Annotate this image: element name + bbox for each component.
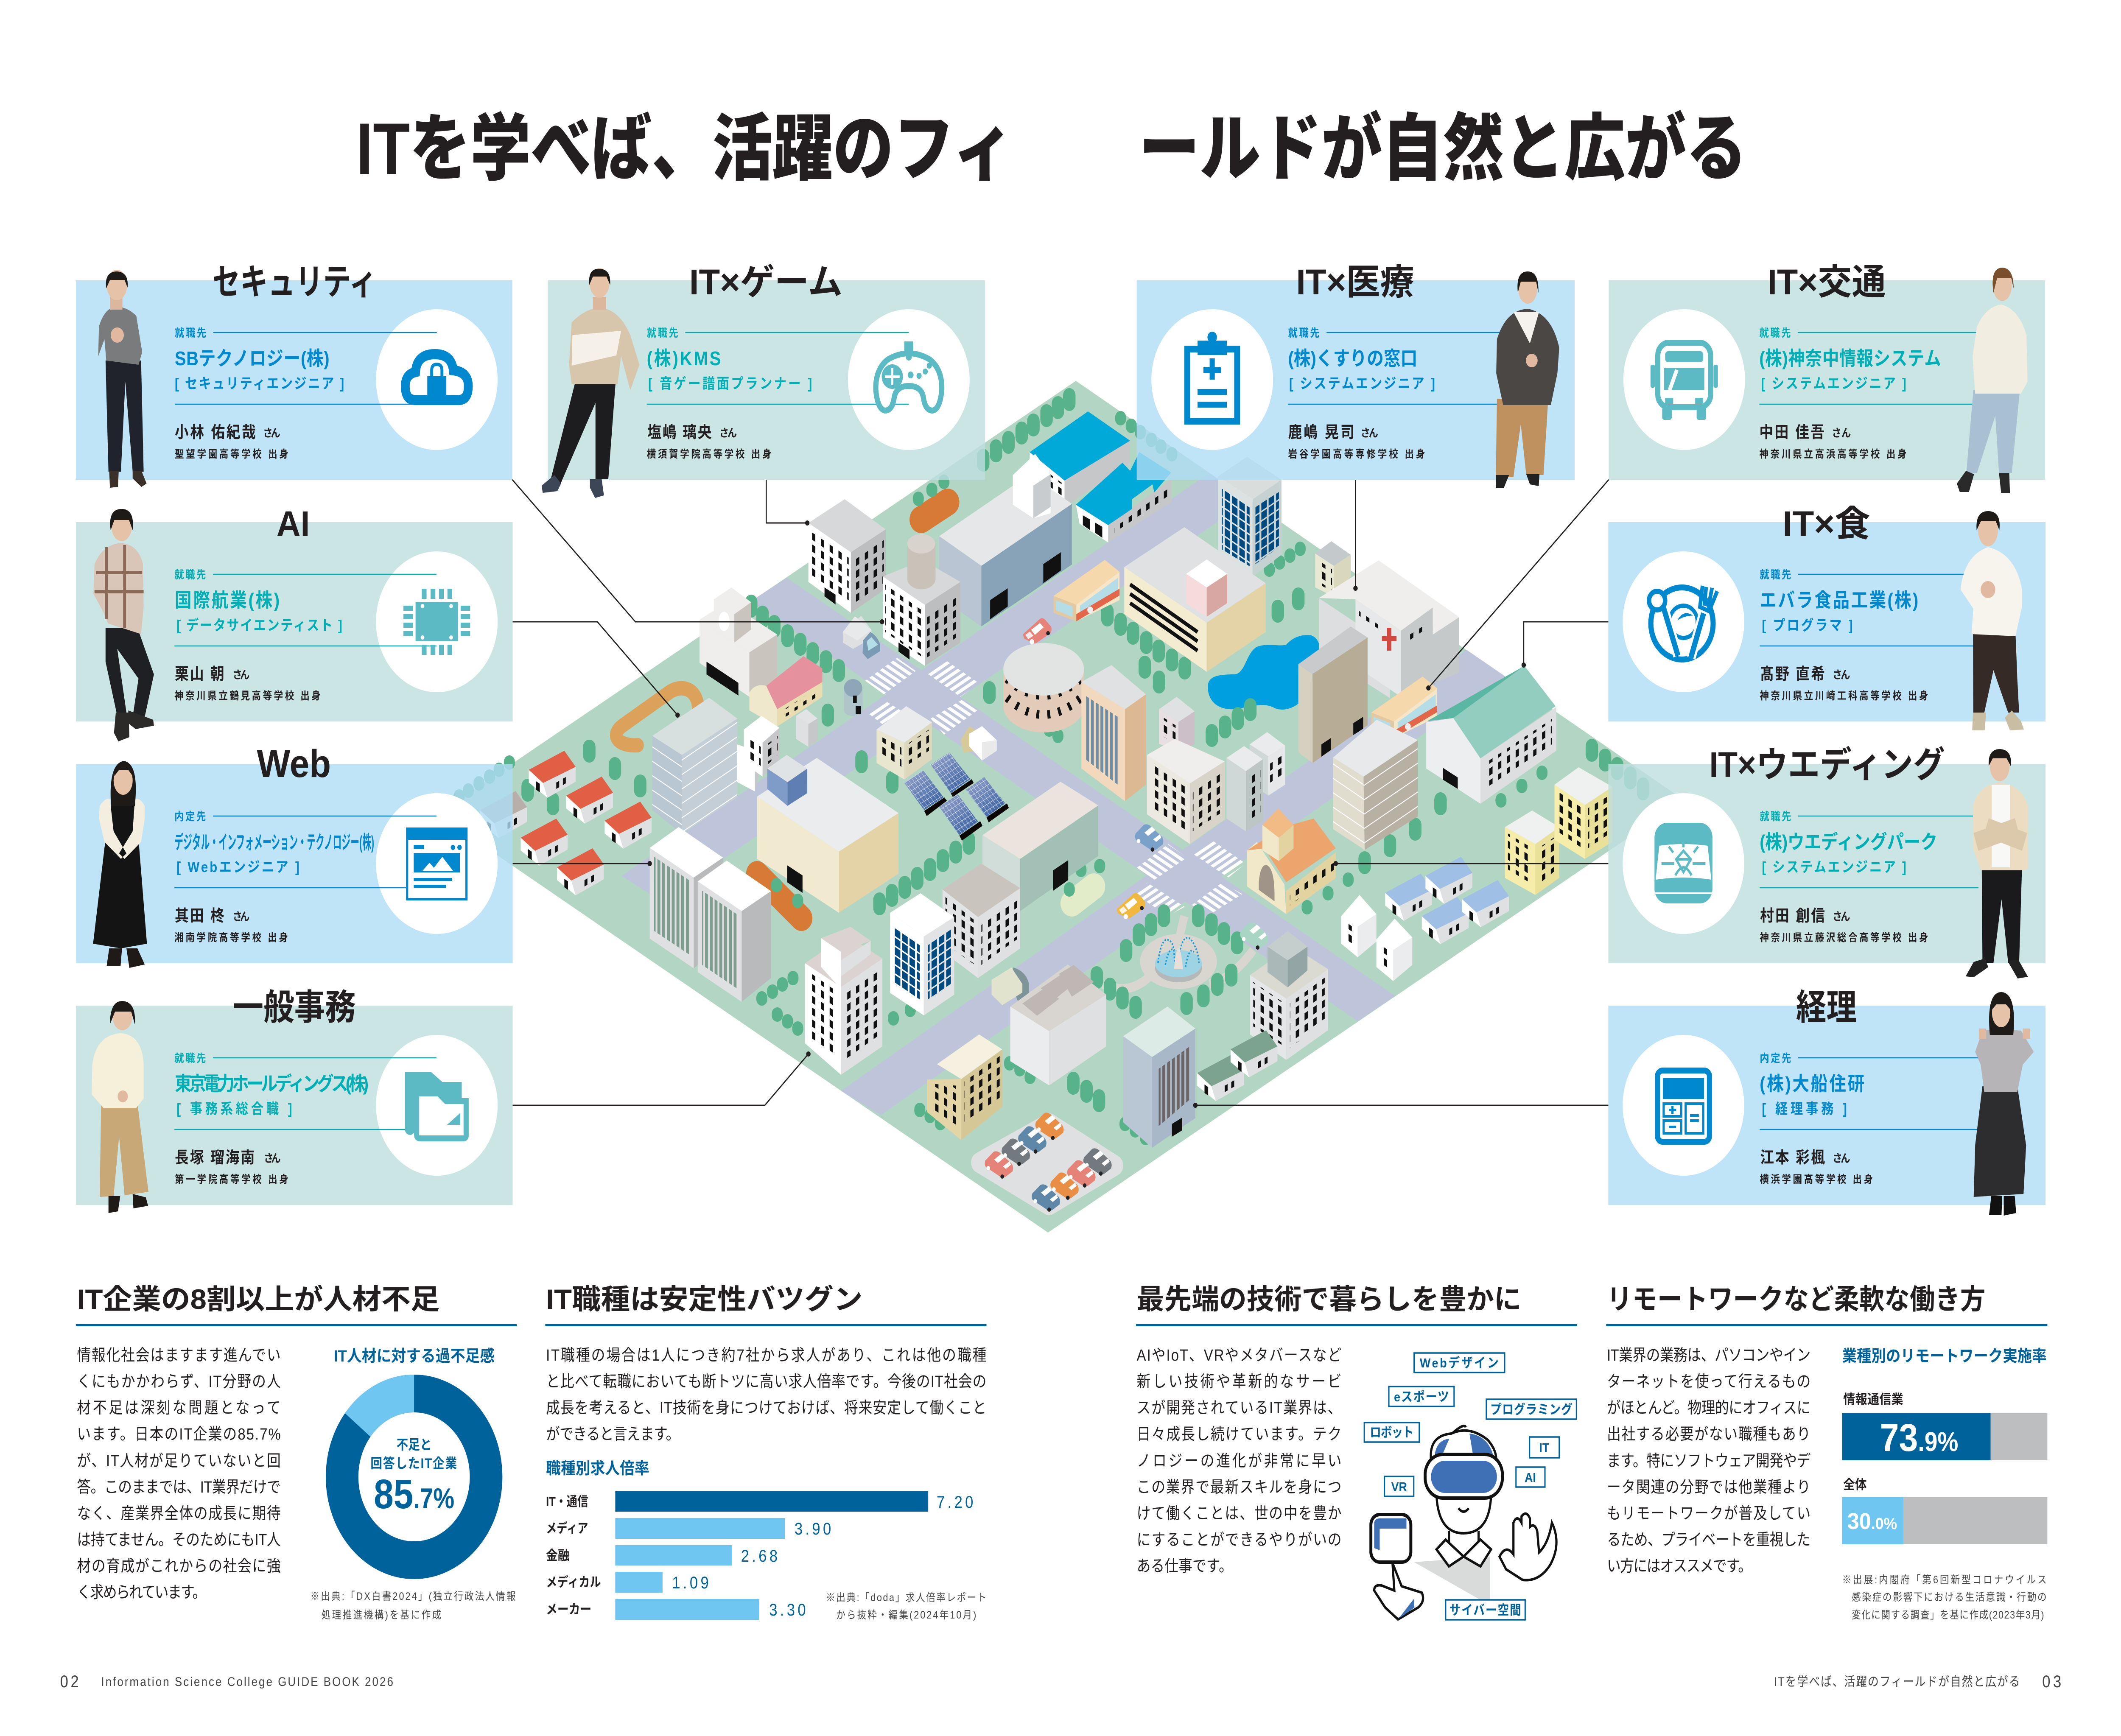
building: striped tall beige block: [1333, 720, 1418, 850]
body text: [1607, 1346, 1810, 1575]
building: white blocks by church: [1341, 895, 1412, 981]
body text: 材の育成がこれからの社会に強: [77, 1557, 281, 1575]
skill tag labels: ロボット: [1370, 1426, 1414, 1440]
building: church: [1247, 808, 1336, 914]
title: ールドが自然と広がる: [1139, 109, 1747, 190]
panel text: accounting: (株)大船住研: [1760, 1073, 1864, 1095]
panel text: office work: [ 事務系総合職 ]: [176, 1101, 292, 1117]
panel text: medical: [ システムエンジニア ]: [1289, 375, 1435, 391]
bar chart: 2.68: [741, 1546, 778, 1565]
panel: AI: [76, 504, 513, 741]
donut chart: IT人材に対する過不足感: [334, 1347, 495, 1365]
building: grey and white small blocks: [737, 709, 817, 791]
building: white apartment with box: [805, 927, 882, 1075]
body text: く求められています。: [77, 1583, 206, 1602]
body text: [1137, 1346, 1342, 1575]
building: cream apartment: [927, 1034, 1002, 1140]
illustration: person with VR headset: [1371, 1426, 1556, 1619]
building: tall glass lined office: [652, 698, 737, 834]
footer left: Information Science College GUIDE BOOK 2026: [101, 1674, 393, 1688]
panel text: accounting: 内定先: [1760, 1053, 1791, 1065]
building: hospital: [1319, 560, 1459, 698]
section: remote work: [1606, 1284, 2047, 1621]
building: blue grey office: [1123, 1006, 1195, 1148]
building: blue sawtooth factory: [1076, 452, 1171, 542]
panel text: security: さん: [263, 428, 280, 439]
panel: food: [1608, 504, 2045, 730]
remote work rate bars: 30: [1847, 1508, 1871, 1534]
body text: ノロジーの進化が非常に早い: [1137, 1452, 1342, 1470]
skill tag labels: Webデザイン: [1420, 1356, 1499, 1370]
person: security: [98, 270, 147, 488]
heading: security: セキュリティ: [213, 262, 377, 302]
building: beige apartment: [1147, 739, 1225, 844]
vehicle: white truck: [960, 726, 997, 760]
building: blue roof hall: [1030, 411, 1130, 507]
trees: [459, 395, 1643, 1139]
parks and fields: [616, 502, 1094, 918]
section: leading technology: [1136, 1284, 1577, 1620]
building: large grey blue hall: [939, 454, 1072, 626]
source note: 変化に関する調査」を基に作成(2023年3月): [1852, 1609, 2044, 1621]
panel: transport: [1609, 262, 2045, 493]
vehicle: truck by crossing: [843, 616, 880, 659]
body text: 情報化社会はますます進んでい: [77, 1346, 281, 1364]
source note: [826, 1592, 987, 1621]
heading: office work: 一般事務: [233, 987, 356, 1027]
body text: と比べて転職においても断トツに高い求人倍率です。今後のIT社会の: [546, 1373, 987, 1391]
panel text: security: [ セキュリティエンジニア ]: [175, 375, 344, 391]
panel text: game: 就職先: [647, 327, 678, 339]
panel text: game: [ 音ゲー譜面プランナー ]: [648, 375, 812, 391]
footer right: 03: [2042, 1672, 2061, 1691]
panel text: Web: 其田 柊: [175, 907, 224, 925]
heading: IT企業の8割以上が人材不足: [77, 1284, 440, 1315]
heading: transport: IT×交通: [1768, 262, 1886, 302]
panel text: transport: [1759, 327, 1979, 460]
footer right: [1774, 1672, 2061, 1691]
panel text: medical: 岩谷学園高等専修学校 出身: [1288, 448, 1425, 460]
building: cream L block: [1124, 527, 1266, 672]
building: white apartment near game line: [809, 499, 886, 613]
body text: けて働くことは、世の中を豊か: [1137, 1504, 1342, 1523]
heading: wedding: IT×ウエディング: [1709, 745, 1945, 785]
body text: スが開発されているIT業界は、: [1137, 1399, 1342, 1417]
building: small beige block: [1315, 541, 1351, 597]
body text: IT職種の場合は1人につき約7社から求人があり、これは他の職種: [546, 1346, 987, 1364]
source note: 処理推進機構)を基に作成: [322, 1609, 441, 1621]
body text: 新しい技術や革新的なサービ: [1137, 1373, 1342, 1391]
bar chart: 7.20: [937, 1493, 973, 1512]
source note: 感染症の影響下における生活意識・行動の: [1852, 1591, 2047, 1603]
panel text: wedding: [1760, 811, 1978, 943]
body text: るため、プライベートを重視した: [1607, 1531, 1810, 1549]
panel: game: [542, 262, 985, 498]
heading: accounting: 経理: [1796, 987, 1857, 1027]
building: green grey warehouse: [982, 782, 1098, 911]
bar chart: 職種別求人倍率: [546, 1459, 649, 1478]
heading: リモートワークなど柔軟な働き方: [1607, 1284, 1985, 1315]
panel text: office work: 長塚 瑠海南: [175, 1149, 255, 1167]
panel text: Web: [ Webエンジニア ]: [176, 859, 299, 875]
icon: folder: [405, 1072, 466, 1138]
building: green roof school: [1426, 666, 1556, 804]
panel text: Web: [174, 811, 437, 943]
building: chapel like white block: [700, 587, 777, 697]
panel text: game: さん: [719, 428, 737, 439]
bar chart: 1.09: [672, 1573, 709, 1592]
panel text: wedding: [ システムエンジニア ]: [1762, 859, 1906, 875]
crosswalks: [865, 658, 1245, 916]
panel text: accounting: 江本 彩楓: [1760, 1149, 1825, 1167]
icon: bus: [1651, 343, 1718, 420]
person: AI: [93, 509, 154, 741]
icon: game controller: [876, 341, 942, 411]
skill tag labels: プログラミング: [1490, 1402, 1573, 1417]
skill tag labels: AI: [1525, 1470, 1536, 1485]
panel text: medical: 就職先: [1288, 327, 1320, 339]
person: food: [1961, 511, 2024, 730]
body text: なく、産業界全体の成長に期待: [77, 1504, 281, 1523]
person: medical: [1496, 271, 1559, 488]
source note: ※出展:内閣府「第6回新型コロナウイルス: [1842, 1574, 2047, 1585]
remote work rate bars: 業種別のリモートワーク実施率: [1842, 1347, 2047, 1365]
body text: にすることができるやりがいの: [1137, 1531, 1342, 1549]
panel: wedding: [1608, 745, 2045, 978]
panel: Web: [76, 742, 513, 968]
houses: blue roofs: [1385, 857, 1509, 944]
pond: [1208, 635, 1320, 710]
panel text: transport: [ システムエンジニア ]: [1761, 375, 1906, 391]
panel text: wedding: (株)ウエディングパーク: [1760, 831, 1937, 853]
panel text: accounting: [1760, 1053, 1978, 1185]
panel text: wedding: 就職先: [1760, 811, 1791, 823]
heading: 最先端の技術で暮らしを豊かに: [1137, 1284, 1522, 1315]
panel text: transport: 中田 佳吾: [1759, 423, 1824, 442]
panel: accounting: [1608, 987, 2045, 1216]
building: tall brown block: [1298, 626, 1368, 763]
section: job stability: [545, 1284, 987, 1621]
body text: IT業界の業務は、パソコンやイン: [1607, 1346, 1810, 1364]
panel text: office work: さん: [264, 1153, 281, 1165]
skill tags: [1364, 1353, 1576, 1620]
building: grey apartment: [943, 864, 1020, 978]
panel text: Web: デジタル・インフォメーション・テクノロジー(株): [174, 832, 374, 853]
building: tan striped office: [1081, 665, 1146, 801]
source note: ※出典:「doda」求人倍率レポート: [826, 1592, 987, 1603]
bar chart: メディア: [546, 1521, 588, 1536]
skill tag labels: [1370, 1356, 1573, 1618]
panel text: accounting: [ 経理事務 ]: [1762, 1101, 1847, 1117]
panel text: AI: 就職先: [174, 569, 206, 581]
houses: green roofs: [1197, 1030, 1277, 1101]
remote work rate bars: [1842, 1347, 2047, 1544]
bar chart: [546, 1459, 973, 1620]
panel text: AI: 栗山 朝: [175, 665, 224, 683]
building: white apartment with cylinder tank: [883, 534, 960, 666]
icon: calculator: [1657, 1071, 1710, 1142]
buildings: yellow apartments: [1505, 767, 1612, 895]
building: small cylinder: [844, 679, 863, 716]
building: twin striped tower back: [650, 827, 723, 968]
panel: medical: [1137, 262, 1575, 488]
skill tag labels: VR: [1391, 1480, 1407, 1494]
parking lot: [980, 1124, 1114, 1205]
panel text: AI: 国際航業(株): [175, 590, 280, 612]
panel text: accounting: さん: [1833, 1153, 1850, 1165]
donut chart: 85: [374, 1471, 413, 1517]
body text: が、IT人材が足りていないと回: [77, 1452, 281, 1470]
panel text: food: 神奈川県立川崎工科高等学校 出身: [1760, 690, 1928, 702]
vehicle: red car: [1023, 618, 1052, 644]
panel: office work: [76, 987, 513, 1213]
panel text: transport: さん: [1832, 428, 1851, 439]
person: Web: [93, 761, 147, 968]
building: twin striped tower front: [698, 861, 771, 1002]
panel text: food: 髙野 直希: [1760, 665, 1825, 683]
icon: browser window: [406, 828, 467, 899]
panel text: transport: 就職先: [1759, 327, 1791, 339]
panel text: Web: 湘南学院高等学校 出身: [174, 932, 288, 943]
panel text: security: 就職先: [175, 327, 206, 339]
panel text: medical: 鹿嶋 晃司: [1288, 423, 1354, 442]
panel text: Web: さん: [233, 911, 249, 923]
body text: ターネットを使って行えるもの: [1607, 1373, 1810, 1391]
building: roof panel block: [1010, 964, 1106, 1085]
panel text: accounting: 横浜学園高等学校 出身: [1760, 1174, 1873, 1185]
building: blue glass tower: [1218, 457, 1282, 577]
source note: [311, 1591, 515, 1621]
panel text: security: [175, 327, 437, 460]
bar chart: 金融: [546, 1549, 569, 1563]
body text: この業界で最新スキルを身につ: [1137, 1478, 1342, 1496]
body text: ができると言えます。: [546, 1425, 680, 1443]
skill tag labels: IT: [1539, 1441, 1549, 1455]
vehicle: blue car: [1135, 824, 1163, 852]
building: pink roof schoolhouse: [750, 656, 822, 727]
donut chart: 不足と: [397, 1437, 432, 1452]
remote work rate bars: 情報通信業: [1843, 1392, 1903, 1407]
title: ITを学べば、活躍のフィ: [356, 109, 1013, 190]
fountain plaza: [1103, 916, 1253, 989]
panel text: game: [647, 327, 909, 460]
panel text: game: 横須賀学院高等学校 出身: [647, 448, 771, 460]
donut chart: .7%: [413, 1482, 454, 1515]
skill tag labels: eスポーツ: [1394, 1390, 1449, 1404]
remote work rate bars: 73: [1880, 1416, 1918, 1459]
panel text: medical: さん: [1360, 428, 1378, 439]
body text: もリモートワークが普及してい: [1607, 1504, 1810, 1523]
building: two grey white blocks: [1226, 732, 1285, 831]
bar chart: 3.90: [795, 1519, 831, 1538]
person: game: [542, 268, 639, 498]
panel text: wedding: 神奈川県立藤沢総合高等学校 出身: [1760, 932, 1928, 943]
vehicle: pale truck: [992, 967, 1029, 1005]
body text: [546, 1346, 987, 1443]
heading: game: IT×ゲーム: [689, 262, 842, 302]
panel text: Web: 内定先: [174, 811, 206, 823]
person: accounting: [1974, 992, 2034, 1216]
body text: AIやIoT、VRやメタバースなど: [1137, 1346, 1342, 1364]
body text: 日々成長し続けています。テク: [1137, 1425, 1342, 1443]
bar chart: IT・通信: [546, 1495, 588, 1509]
source note: ※出典:「DX白書2024」(独立行政法人情報: [311, 1591, 515, 1602]
panel text: office work: 就職先: [174, 1053, 206, 1065]
icon: cloud lock: [405, 354, 468, 400]
person: office work: [92, 1001, 148, 1213]
vehicle: pale green car: [1240, 922, 1268, 950]
remote work rate bars: .0%: [1871, 1515, 1897, 1533]
panel text: food: [ プログラマ ]: [1762, 617, 1853, 633]
body text: がほとんど。物理的にオフィスに: [1607, 1399, 1810, 1417]
building: apartment with grey box: [1250, 931, 1328, 1060]
body text: ある仕事です。: [1137, 1557, 1233, 1575]
icon: microchip: [403, 589, 470, 655]
person: wedding: [1966, 749, 2028, 978]
source note: [1842, 1574, 2047, 1621]
body text: くにもかかわらず、IT分野の人: [77, 1373, 281, 1391]
source note: から抜粋・編集(2024年10月): [836, 1609, 976, 1621]
donut chart: [313, 1347, 515, 1594]
footer left: 02: [60, 1672, 79, 1691]
heading: Web: Web: [257, 742, 331, 786]
bar chart: メディカル: [546, 1575, 601, 1590]
bar chart: 3.30: [769, 1600, 806, 1619]
house: grey roof: [480, 791, 527, 838]
building: white blue glass tower: [890, 893, 954, 1015]
icon: ring box: [1654, 823, 1713, 903]
panel text: wedding: さん: [1833, 911, 1850, 923]
body text: 成長を考えると、IT技術を身につけておけば、将来安定して働くこと: [546, 1399, 987, 1417]
body text: います。日本のIT企業の85.7%: [77, 1425, 281, 1443]
isometric city map: [437, 381, 1684, 1233]
remote work rate bars: .9%: [1918, 1426, 1958, 1457]
connector lines: [512, 480, 1609, 1108]
body text: 材不足は深刻な問題となって: [77, 1399, 281, 1417]
icon: medical clipboard: [1187, 332, 1237, 421]
panel: security: [76, 262, 512, 488]
panel text: office work: 第一学院高等学校 出身: [175, 1174, 288, 1185]
solar panels: [904, 752, 1009, 841]
panel text: transport: 神奈川県立高浜高等学校 出身: [1759, 448, 1907, 460]
panel text: security: SBテクノロジー(株): [175, 348, 330, 370]
panel text: AI: [174, 569, 437, 702]
body text: は持てません。そのためにもIT人: [77, 1531, 281, 1549]
panel text: game: (株)KMS: [647, 348, 721, 370]
panel text: AI: 神奈川県立鶴見高等学校 出身: [174, 690, 321, 702]
panel text: office work: [174, 1053, 437, 1185]
houses: red roofs: [521, 751, 652, 895]
person: transport: [1957, 268, 2028, 493]
vehicle: bus near hospital: [1371, 677, 1437, 738]
heading: food: IT×食: [1782, 504, 1870, 544]
bar chart: メーカー: [546, 1602, 591, 1617]
panel text: medical: [1288, 327, 1507, 460]
body text: [77, 1346, 281, 1602]
building: pink grey small block: [1159, 697, 1195, 751]
section: talent shortage: [76, 1284, 517, 1621]
panel text: wedding: 村田 創信: [1760, 907, 1825, 925]
panel text: AI: [ データサイエンティスト ]: [176, 617, 342, 633]
body text: ータ関連の分野では他業種より: [1607, 1478, 1810, 1496]
panel text: food: [1760, 569, 1978, 702]
body text: 出社する必要がない職種もあり: [1607, 1425, 1810, 1443]
donut chart: 回答したIT企業: [370, 1456, 457, 1471]
vehicle: yellow car: [1117, 893, 1145, 919]
roads: [621, 473, 1505, 1115]
footer left: [60, 1672, 393, 1691]
body text: い方にはオススメです。: [1607, 1557, 1752, 1575]
panel text: office work: 東京電力ホールディングス(株): [175, 1073, 369, 1095]
icon: plate with spoon and fork: [1649, 586, 1717, 660]
heading: medical: IT×医療: [1296, 262, 1414, 302]
remote work rate bars: 全体: [1843, 1478, 1867, 1492]
panel text: food: エバラ食品工業(株): [1760, 590, 1918, 612]
skill tag labels: サイバー空間: [1449, 1603, 1521, 1618]
panel text: food: さん: [1833, 669, 1850, 681]
panel text: food: 就職先: [1760, 569, 1791, 581]
body text: 答。このままでは、IT業界だけで: [77, 1478, 281, 1496]
building: pink roof box: [1186, 559, 1227, 617]
title: [356, 109, 1747, 190]
panel text: security: 小林 佑紀哉: [175, 423, 256, 442]
building: pale block near crossing: [876, 706, 932, 780]
panel text: AI: さん: [233, 669, 249, 681]
map ground: [437, 381, 1684, 1233]
panel text: transport: (株)神奈中情報システム: [1759, 348, 1941, 370]
panel text: game: 塩嶋 璃央: [647, 423, 712, 442]
heading: IT職種は安定性バツグン: [546, 1284, 863, 1315]
panel text: security: 聖望学園高等学校 出身: [175, 448, 288, 460]
body text: ます。特にソフトウェア開発やデ: [1607, 1452, 1810, 1470]
vehicle: bus on upper road: [1054, 560, 1119, 621]
building: round hall: [1003, 643, 1084, 732]
building: large cream block: [757, 755, 898, 913]
panel text: medical: (株)くすりの窓口: [1288, 348, 1417, 370]
parked cars: [985, 1113, 1112, 1212]
heading: AI: AI: [277, 504, 310, 544]
footer right: ITを学べば、活躍のフィールドが自然と広がる: [1774, 1674, 2020, 1688]
